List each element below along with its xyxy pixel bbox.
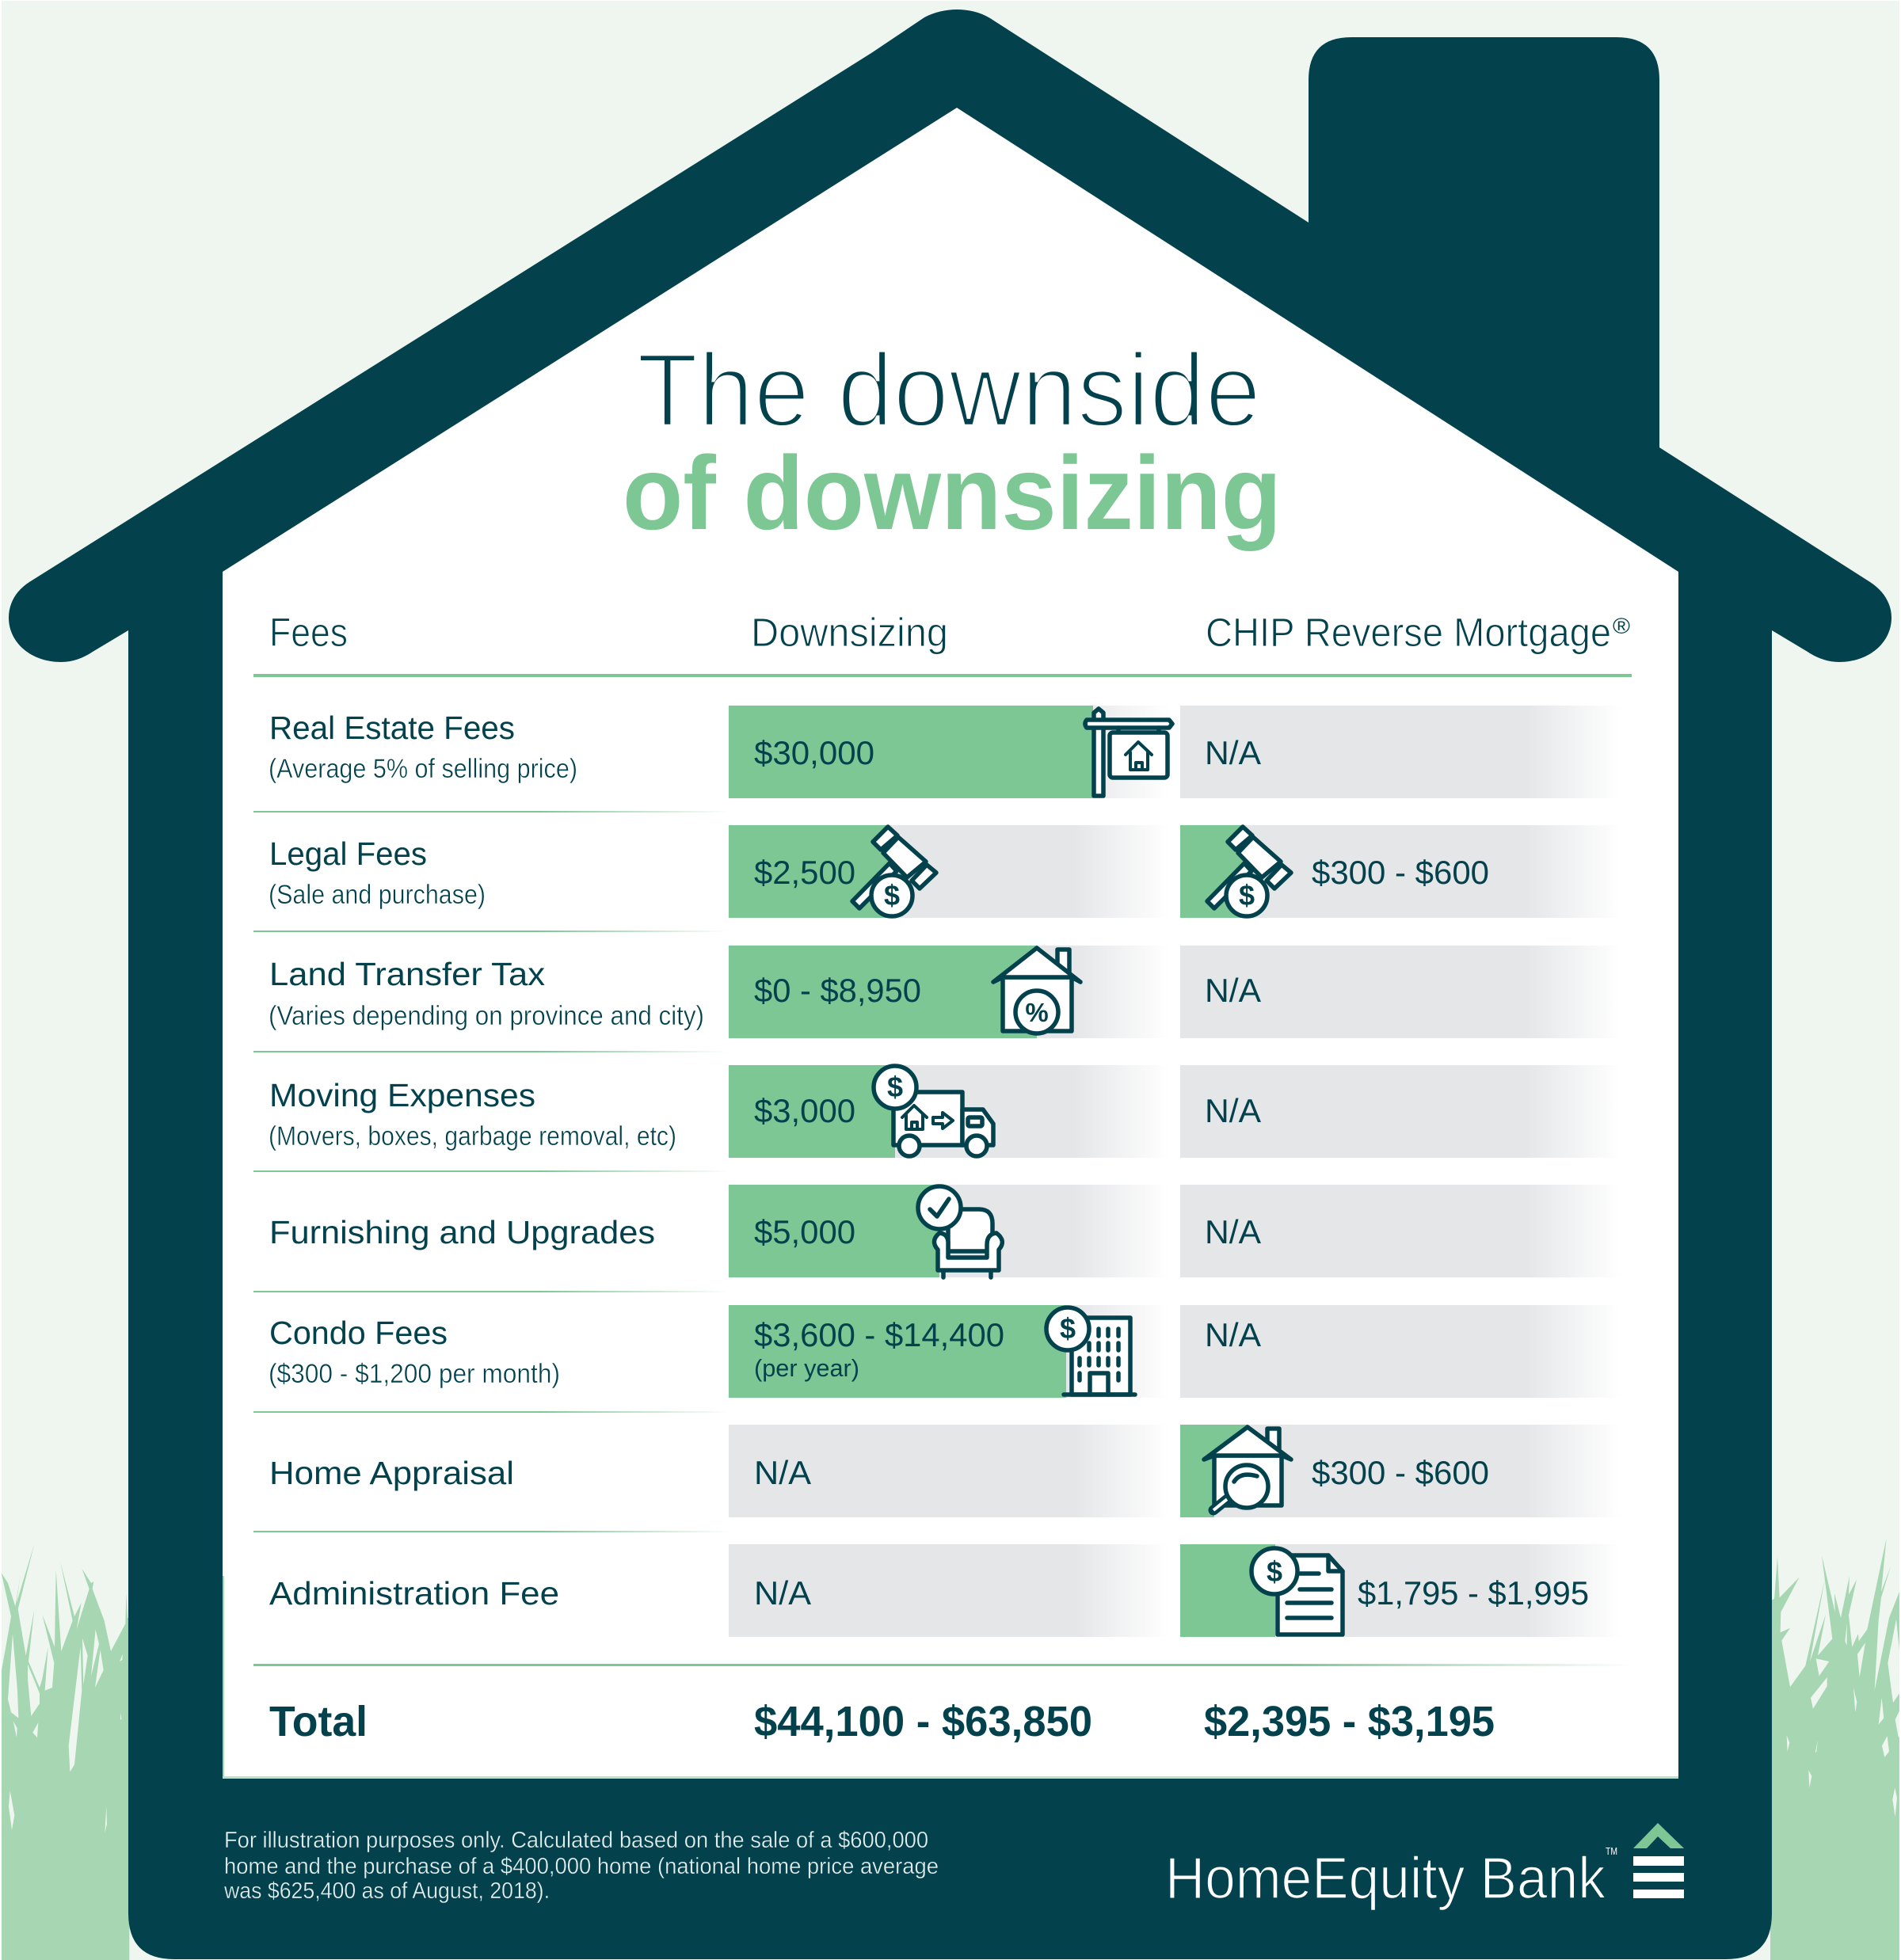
label: Moving Expenses	[269, 1077, 535, 1113]
label: (Movers, boxes, garbage removal, etc)	[269, 1121, 676, 1151]
downsizing bar	[729, 1305, 1169, 1398]
downsizing bar: N/A	[754, 1454, 811, 1491]
downsizing bar: N/A	[754, 1574, 811, 1612]
chip bar: N/A	[1205, 734, 1261, 771]
totals row	[269, 1698, 1495, 1745]
icon: house with percent	[993, 948, 1080, 1033]
icon: house with magnifier	[1204, 1427, 1291, 1510]
totals row: $44,100 - $63,850	[754, 1698, 1092, 1745]
icon: fee document: $	[1267, 1555, 1282, 1588]
title	[623, 332, 1282, 551]
label: Land Transfer Tax	[269, 956, 546, 992]
logo: HomeEquity Bank: HomeEquity Bank	[1165, 1845, 1606, 1911]
white house interior panel	[223, 108, 1678, 1779]
downsizing bar: $30,000	[754, 734, 874, 771]
label: (Varies depending on province and city)	[269, 1001, 704, 1031]
totals row: $2,395 - $3,195	[1204, 1698, 1495, 1745]
label	[269, 710, 577, 784]
downsizing bar	[729, 825, 1169, 918]
table header: ®	[1613, 614, 1630, 638]
chip bar: N/A	[1205, 1213, 1261, 1250]
label	[269, 835, 486, 910]
label: Real Estate Fees	[269, 710, 515, 746]
downsizing bar	[729, 706, 1169, 798]
logo: HomeEquity Bank	[1165, 1823, 1684, 1911]
label	[269, 956, 704, 1031]
chip bar	[1180, 1185, 1621, 1277]
chip bar: $1,795 - $1,995	[1358, 1574, 1589, 1612]
row: land transfer tax	[269, 946, 1621, 1038]
table header	[253, 610, 1632, 677]
downsizing bar	[729, 1185, 1169, 1277]
downsizing bar	[729, 1425, 1169, 1517]
row: home appraisal	[269, 1425, 1621, 1517]
chip bar	[1180, 825, 1621, 918]
right grass	[1770, 1538, 1899, 1960]
chip bar	[1180, 1065, 1621, 1158]
label: (Sale and purchase)	[269, 880, 486, 910]
footnote: For illustration purposes only. Calculated based on the sale of a $600,000	[224, 1828, 928, 1853]
label: Administration Fee	[269, 1575, 559, 1612]
chip bar	[1180, 946, 1621, 1038]
chip bar: $300 - $600	[1312, 854, 1489, 891]
chip bar: N/A	[1205, 972, 1261, 1009]
icon: armchair with check	[918, 1186, 1002, 1277]
footnote	[223, 1828, 939, 1904]
icon: condo building	[1046, 1307, 1135, 1395]
downsizing bar: $5,000	[754, 1213, 855, 1250]
left grass	[2, 1544, 129, 1960]
label	[269, 1077, 676, 1151]
icon: moving truck: $	[887, 1071, 903, 1103]
row: administration fee	[269, 1544, 1621, 1637]
totals row: Total	[269, 1698, 368, 1745]
table header: Fees	[269, 610, 348, 655]
chip bar: N/A	[1205, 1316, 1261, 1353]
icon: gavel and coin: $	[884, 879, 900, 911]
logo: HomeEquity Bank: TM	[1606, 1845, 1617, 1857]
downsizing bar	[729, 1065, 1169, 1158]
downsizing bar	[729, 946, 1169, 1038]
downsizing bar: $3,000	[754, 1092, 855, 1129]
downsizing bar: (per year)	[754, 1354, 859, 1382]
downsizing bar: $2,500	[754, 854, 855, 891]
footnote: home and the purchase of a $400,000 home (national home price average	[224, 1854, 939, 1879]
icon: for sale sign	[1085, 709, 1172, 796]
label: Condo Fees	[269, 1315, 448, 1351]
table header: Downsizing	[751, 610, 948, 655]
icon: gavel and coin: $	[1239, 879, 1255, 911]
row: legal fees	[269, 825, 1621, 918]
label: ($300 - $1,200 per month)	[269, 1359, 560, 1389]
chip bar: N/A	[1205, 1092, 1261, 1129]
label: Legal Fees	[269, 835, 427, 872]
icon: house with percent: %	[1025, 998, 1049, 1027]
row: moving expenses	[269, 1065, 1621, 1158]
logo mark	[1633, 1823, 1684, 1898]
label: Home Appraisal	[269, 1455, 514, 1491]
chip bar	[1180, 1305, 1621, 1398]
chip bar	[1180, 1544, 1621, 1637]
title: The downside	[637, 332, 1261, 448]
downsizing bar	[729, 1544, 1169, 1637]
chip bar	[1180, 1425, 1621, 1517]
chip bar	[1180, 706, 1621, 798]
label: (Average 5% of selling price)	[269, 754, 577, 784]
chip bar: $300 - $600	[1312, 1454, 1489, 1491]
footnote: was $625,400 as of August, 2018).	[223, 1878, 550, 1904]
icon: gavel and coin	[852, 827, 936, 916]
row: real estate fees	[269, 706, 1621, 798]
label	[269, 1315, 560, 1389]
icon: gavel and coin	[1207, 827, 1291, 916]
downsizing bar: $3,600 - $14,400	[754, 1316, 1004, 1353]
row: furnishing and upgrades	[269, 1185, 1621, 1277]
title: of downsizing	[623, 435, 1282, 551]
downsizing bar: $0 - $8,950	[754, 972, 921, 1009]
icon: moving truck	[874, 1066, 993, 1156]
icon: fee document	[1251, 1548, 1343, 1635]
table header: CHIP Reverse Mortgage	[1206, 610, 1611, 655]
label: Furnishing and Upgrades	[269, 1214, 655, 1250]
icon: condo building: $	[1060, 1312, 1076, 1345]
row: condo fees	[269, 1305, 1621, 1398]
